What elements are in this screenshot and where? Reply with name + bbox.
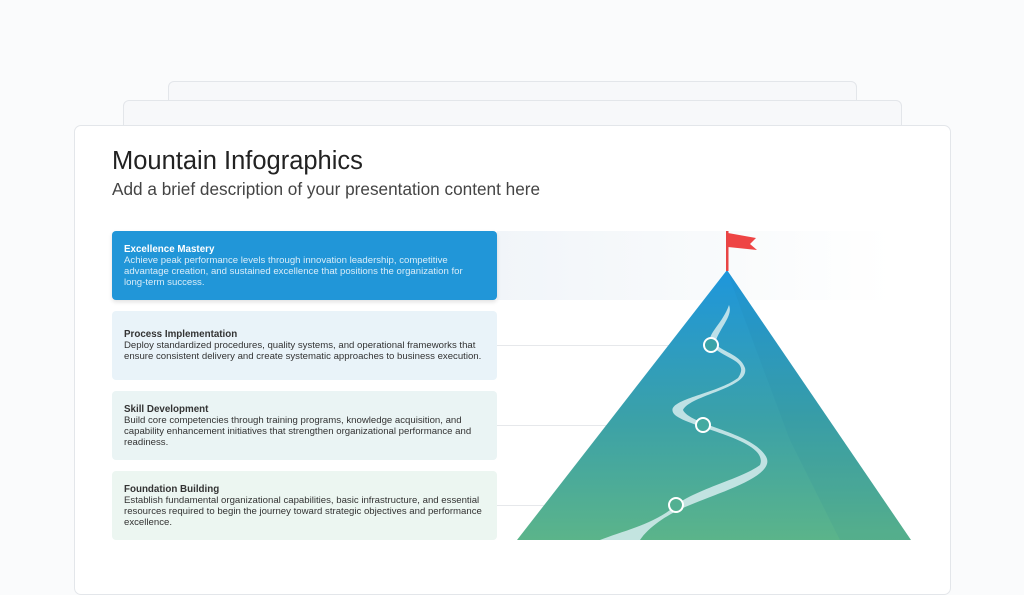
- card: Excellence Mastery: Achieve peak performance levels through innovation leadership, competitive: [124, 254, 448, 266]
- card: Foundation Building: [112, 471, 497, 540]
- card: Process Implementation: Deploy standardized procedures, quality systems, and operational frameworks that: [124, 340, 475, 351]
- connector line 3: [497, 505, 677, 506]
- connector line 2: [497, 425, 703, 426]
- card: Foundation Building: Foundation Building: [124, 484, 219, 494]
- card: Skill Development: Skill Development: [124, 404, 208, 414]
- highlight band: [497, 231, 892, 300]
- card: Excellence Mastery: [112, 231, 497, 300]
- card: Foundation Building: resources required to begin the journey toward strategic objectives and performance: [124, 506, 482, 516]
- flag: [726, 231, 728, 271]
- card: Skill Development: Build core competencies through training programs, knowledge acquisition, and: [124, 414, 462, 426]
- main panel: [74, 125, 951, 595]
- trail: [600, 305, 767, 540]
- card: Skill Development: [112, 391, 497, 460]
- card: Process Implementation: Process Implementation: [124, 329, 237, 340]
- card: Excellence Mastery: long-term success.: [124, 276, 205, 288]
- card: Skill Development: readiness.: [124, 436, 168, 448]
- card: Foundation Building: Establish fundamental organizational capabilities, basic infrastructure, and essential: [124, 494, 479, 506]
- title: Mountain Infographics: [112, 147, 363, 175]
- card: Foundation Building: excellence.: [124, 516, 172, 528]
- card: Process Implementation: ensure consistent delivery and create systematic approaches to business execution.: [124, 351, 481, 362]
- mountain body: [517, 270, 911, 540]
- card: Process Implementation: [112, 311, 497, 380]
- card: Excellence Mastery: Excellence Mastery: [124, 244, 214, 254]
- milestone circles: [704, 338, 718, 352]
- subtitle: Add a brief description of your presentation content here: [112, 179, 540, 199]
- back card 2: [168, 81, 857, 141]
- back card 1: [123, 100, 902, 160]
- card: Excellence Mastery: advantage creation, and sustained excellence that positions the organization for: [124, 266, 463, 276]
- connector line 1: [497, 345, 712, 346]
- card: Skill Development: capability enhancement initiatives that strengthen organizational performance and: [124, 426, 471, 436]
